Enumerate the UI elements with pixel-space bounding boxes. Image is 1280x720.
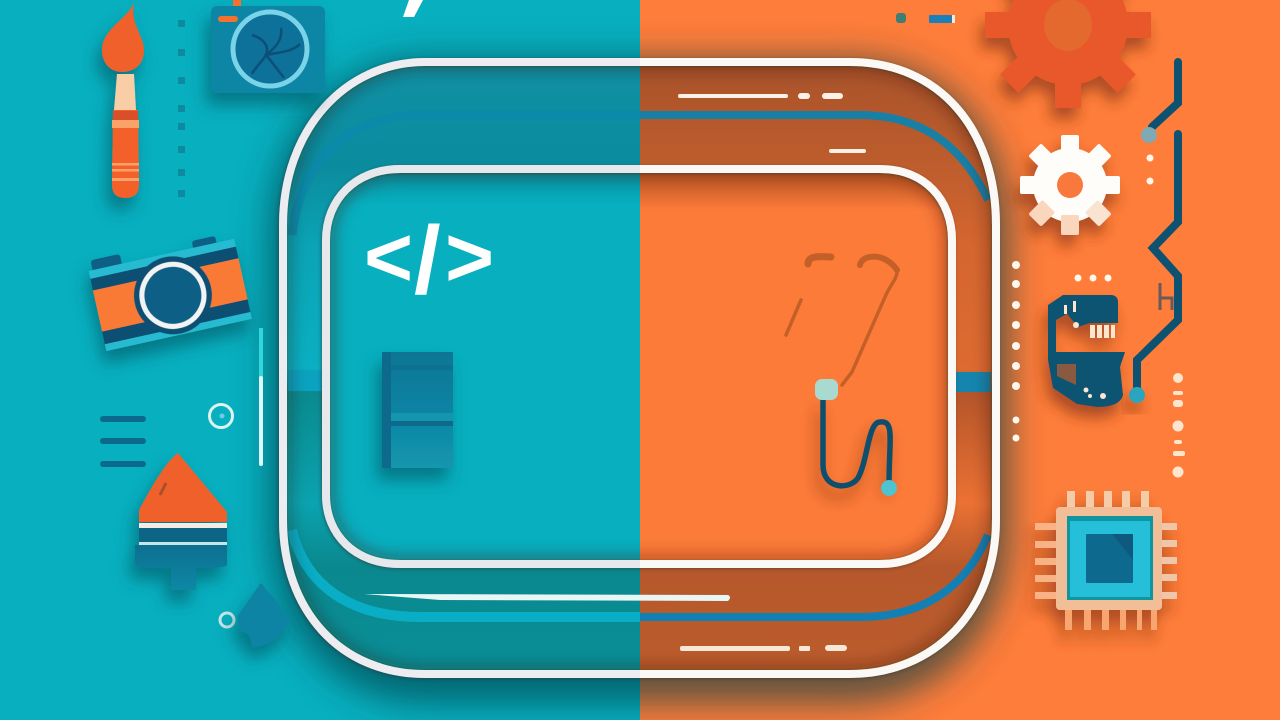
- icon: microchip: [1035, 491, 1177, 630]
- connector left: [288, 370, 324, 391]
- icon: circuit card: [1048, 295, 1125, 407]
- icon: teal camera: [211, 0, 325, 93]
- code icon: <: [364, 210, 413, 304]
- icon: orange camera: [86, 229, 252, 351]
- document block icon: [382, 352, 453, 468]
- upper curved band: orange side: [640, 111, 990, 202]
- small ring icon: [210, 404, 232, 428]
- vertical glowing line: [259, 328, 263, 466]
- circuit node blue: [1129, 387, 1145, 403]
- frame band: orange side: [640, 66, 992, 670]
- circuit trace lower: [1137, 134, 1178, 395]
- chip pins right: [1160, 523, 1177, 599]
- code icon: [364, 207, 494, 314]
- hamburger lines: [100, 416, 146, 467]
- chip pins left: [1035, 523, 1058, 599]
- lower long line: [364, 594, 730, 601]
- background: teal half: [0, 0, 640, 720]
- lower curved band: orange side: [640, 534, 992, 621]
- chip inner: [1067, 516, 1153, 600]
- top dashes on frame: [678, 93, 866, 153]
- stethoscope faint ear tubes: [786, 257, 897, 385]
- ring outer shadow: [283, 72, 996, 690]
- small top marks: [896, 13, 955, 23]
- stethoscope tube: [823, 398, 890, 486]
- circuit node grey: [1141, 127, 1157, 143]
- chip body: [1056, 507, 1162, 610]
- upper curved band: teal side: [288, 110, 640, 236]
- icon: large red gear: [985, 0, 1151, 108]
- inner panel: teal side: [330, 173, 640, 560]
- small H mark: [1160, 283, 1172, 310]
- inner panel: orange side: [640, 173, 948, 560]
- chip core: [1086, 534, 1133, 583]
- connector right: [955, 372, 991, 392]
- lower curved band: teal side: [288, 529, 640, 622]
- background: orange half: [640, 0, 1280, 720]
- icon: white gear: [1020, 135, 1120, 235]
- frame band: teal side: [287, 66, 640, 670]
- chip pins bottom: [1065, 608, 1157, 630]
- stethoscope head: [815, 379, 838, 400]
- stethoscope end ball: [881, 480, 897, 496]
- inner panel shadow: [326, 169, 954, 564]
- icon: dark arrow shape: [239, 585, 289, 646]
- red gear hole: [1044, 0, 1092, 51]
- dotted column: [178, 20, 185, 197]
- icon: paintbrush: [102, 0, 144, 198]
- outer white ring: [283, 62, 996, 674]
- code icon: /: [414, 207, 441, 314]
- white dots column: [1012, 154, 1154, 442]
- bottom dashes on frame: [680, 645, 847, 651]
- peach dots column: [1172, 373, 1185, 478]
- band inner shadow: [283, 62, 996, 674]
- small ring bottom: [220, 613, 234, 627]
- code icon: >: [445, 210, 494, 304]
- icon: house-shaped brush: [135, 453, 227, 590]
- top cropped title stroke: [403, 0, 423, 17]
- circuit trace upper: [1152, 62, 1178, 127]
- chip pins top: [1067, 491, 1149, 509]
- inner white ring: [326, 169, 952, 564]
- stethoscope: [786, 257, 897, 496]
